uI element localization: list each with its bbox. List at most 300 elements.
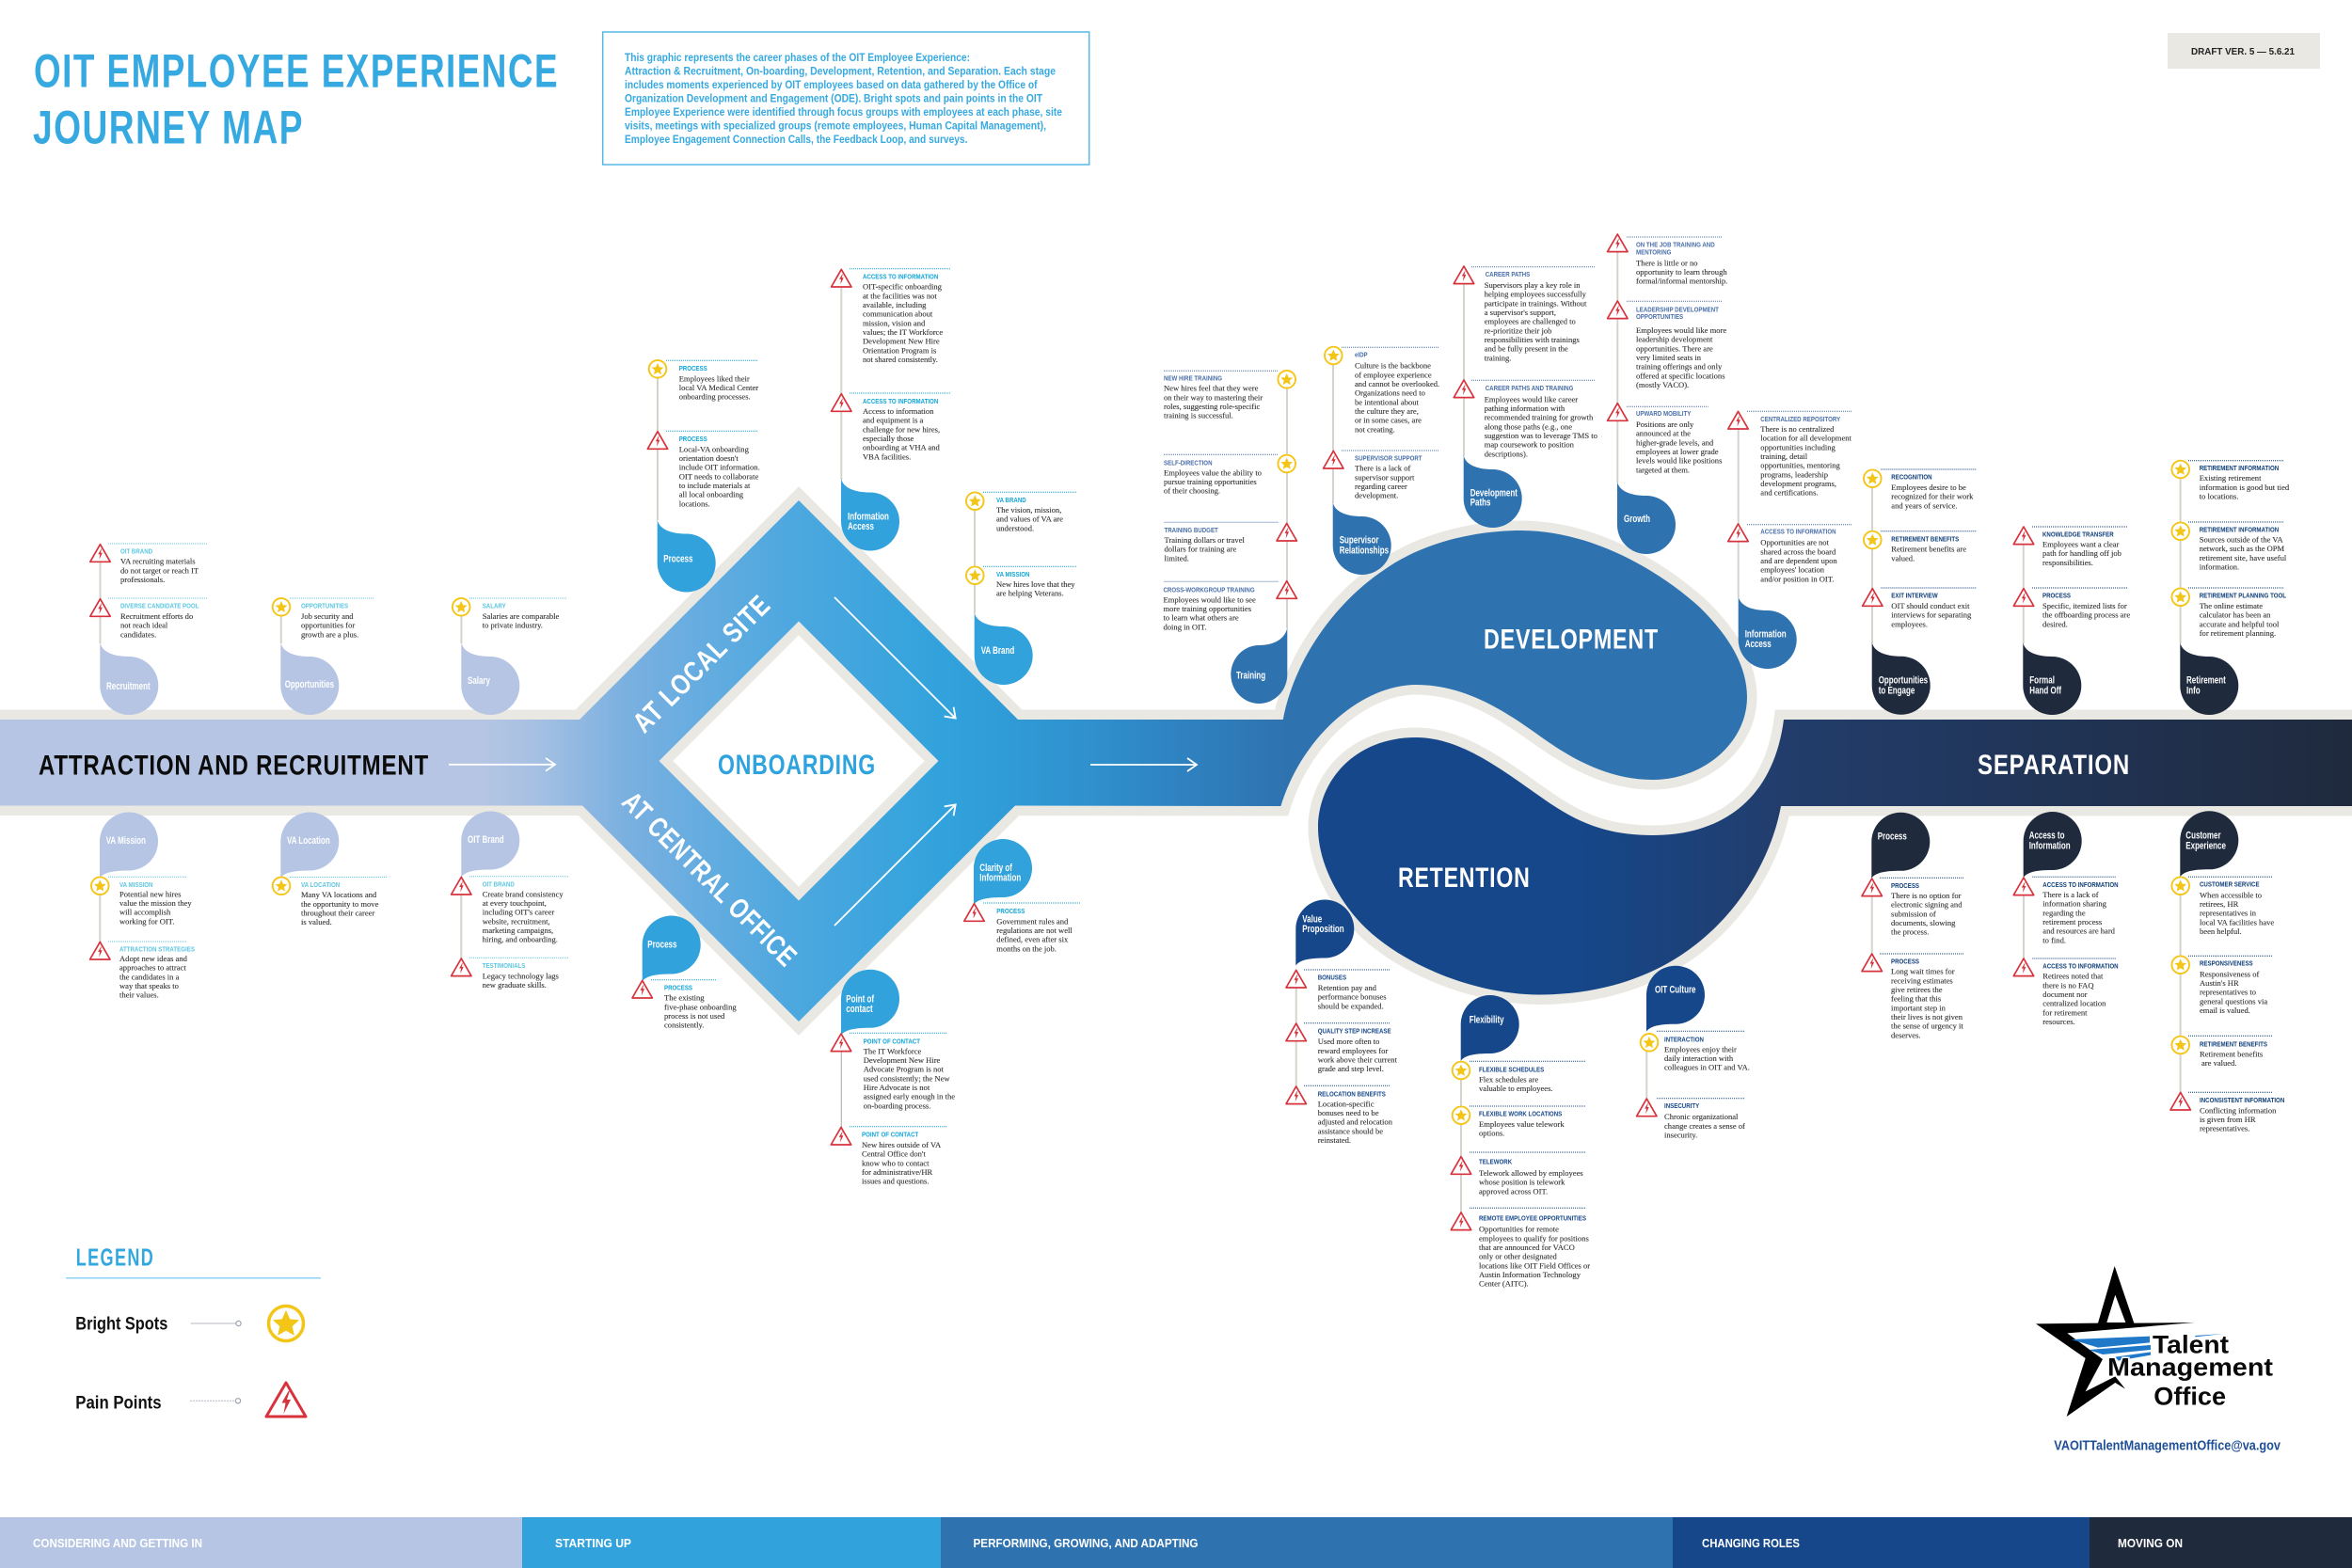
callout body: (mostly VACO).	[1636, 380, 1689, 389]
icon: star logo	[2036, 1266, 2223, 1417]
callout body: orientation doesn't	[679, 453, 739, 463]
callout: Testimonials	[452, 958, 569, 990]
callout body: been helpful.	[2200, 927, 2242, 936]
icon: bright spot	[1864, 469, 1882, 487]
callout body: Opportunities for remote	[1479, 1225, 1559, 1234]
callout: Flexible work locations	[1453, 1106, 1586, 1138]
callout body: all local onboarding	[679, 490, 744, 499]
footer: performing, growing, and adapting	[941, 1517, 1673, 1568]
drop: VA Brand: VA Brand	[981, 645, 1014, 657]
drop: VA Location: VA Location	[287, 835, 330, 847]
column: Process (separation)	[1862, 813, 1964, 1039]
callout body: formal/informal mentorship.	[1636, 277, 1727, 286]
footer: moving on: MOVING ON	[2118, 1536, 2183, 1550]
callout body: recognized for their work	[1891, 492, 1974, 501]
callout body: issues and questions.	[862, 1177, 929, 1186]
callout heading: PROCESS	[996, 909, 1025, 915]
callout heading: TELEWORK	[1479, 1159, 1512, 1166]
callout body: challenge for new hires,	[863, 424, 940, 434]
icon: bright spot	[1864, 531, 1882, 548]
callout body: and/or position in OIT.	[1760, 574, 1834, 583]
callout heading: RETIREMENT BENEFITS	[2200, 1041, 2267, 1048]
callout body: daily interaction with	[1664, 1053, 1734, 1063]
callout body: a supervisor's support,	[1485, 308, 1556, 317]
callout body: Create brand consistency	[483, 889, 564, 898]
callout body: Existing retirement	[2200, 473, 2262, 483]
callout body: assistance should be	[1318, 1126, 1383, 1135]
callout body: that are announced for VACO	[1479, 1243, 1575, 1252]
callout body: to private industry.	[483, 621, 543, 630]
callout heading: NEW HIRE TRAINING	[1164, 375, 1222, 382]
title: OIT EMPLOYEE EXPERIENCE	[34, 45, 559, 98]
drop: Development Paths	[1464, 455, 1522, 528]
callout body: submission of	[1891, 909, 1936, 918]
icon: pain point	[90, 599, 110, 616]
callout body: Employees would like more	[1636, 325, 1726, 335]
drop: Flexibility	[1461, 995, 1519, 1061]
callout body: Recruitment efforts do	[120, 611, 193, 621]
drop: Supervisor Relationships: Relationships	[1340, 545, 1389, 557]
callout body: used consistently; the New	[864, 1073, 950, 1083]
callout body: Job security and	[301, 611, 354, 621]
callout body: Central Office don't	[862, 1149, 926, 1159]
callout body: locations.	[679, 499, 710, 508]
icon: bright spot	[91, 877, 109, 895]
callout body: retirement site, have useful	[2200, 553, 2287, 562]
callout: Process	[632, 980, 737, 1030]
callout body: the opportunity to move	[301, 899, 379, 909]
callout body: New hires feel that they were	[1164, 384, 1259, 393]
callout body: Retirees noted that	[2042, 972, 2104, 981]
logo: Talent Management Office	[2036, 1266, 2280, 1454]
callout body: five-phase onboarding	[664, 1002, 737, 1011]
callout body: Used more often to	[1318, 1037, 1379, 1046]
icon: bright spot	[1325, 347, 1343, 364]
icon: pain point	[1862, 954, 1882, 972]
callout body: local VA Medical Center	[679, 383, 758, 392]
callout body: Orientation Program is	[863, 345, 937, 355]
callout body: valuable to employees.	[1479, 1084, 1553, 1093]
callout body: way that speaks to	[119, 981, 179, 990]
icon: bright spot	[2171, 461, 2189, 478]
callout body: documents, slowing	[1891, 918, 1956, 927]
heading: at central office: AT CENTRAL OFFICE	[616, 786, 803, 973]
callout heading: TRAINING BUDGET	[1165, 527, 1219, 534]
callout heading: CAREER PATHS	[1486, 272, 1531, 278]
callout body: communication about	[863, 309, 933, 319]
callout body: whose position is telework	[1479, 1178, 1565, 1187]
arrow: onboarding to development	[1090, 758, 1197, 771]
callout heading: TESTIMONIALS	[483, 963, 526, 970]
icon: pain point	[831, 1127, 851, 1145]
column: Point of contact	[831, 970, 955, 1186]
callout heading: PROCESS	[1891, 958, 1919, 966]
callout heading: ACCESS TO INFORMATION	[1760, 529, 1836, 536]
column: VA Mission	[90, 813, 195, 1000]
icon: pain point	[832, 394, 851, 411]
callout body: employees.	[1891, 619, 1928, 628]
callout heading: SALARY	[483, 603, 506, 610]
callout body: representatives.	[2200, 1124, 2249, 1133]
drop: Customer Experience	[2180, 811, 2238, 877]
intro text box: includes moments experienced by OIT employees based on data gathered by the Office of	[625, 78, 1038, 91]
heading: onboarding: ONBOARDING	[718, 750, 876, 781]
callout heading: RETIREMENT INFORMATION	[2200, 466, 2279, 472]
drop: Retirement Info: Retirement	[2186, 675, 2226, 687]
callout: Bonuses	[1286, 970, 1391, 1010]
callout body: Responsiveness of	[2200, 969, 2260, 978]
callout heading: CENTRALIZED REPOSITORY	[1760, 417, 1841, 423]
callout body: only or other designated	[1479, 1252, 1558, 1261]
callout: VA Brand	[966, 492, 1076, 532]
callout body: Sources outside of the VA	[2200, 534, 2283, 544]
intro text box: This graphic represents the career phases of the OIT Employee Experience:	[625, 51, 970, 64]
callout body: OIT-specific onboarding	[863, 282, 943, 292]
heading: at local site: AT LOCAL SITE	[628, 590, 777, 739]
callout body: not creating.	[1355, 424, 1395, 434]
callout body: the sense of urgency it	[1891, 1022, 1963, 1031]
legend: pain points: Pain Points	[75, 1393, 162, 1413]
callout body: Specific, itemized lists for	[2042, 601, 2127, 610]
footer: performing, growing, and adapting: PERFORMING, GROWING, AND ADAPTING	[973, 1536, 1199, 1550]
arrow: local site diagonal	[830, 593, 961, 723]
callout: OIT Brand	[452, 877, 569, 944]
callout body: Employees enjoy their	[1664, 1044, 1737, 1053]
drop: Clarity of Information	[974, 839, 1032, 905]
callout body: VA recruiting materials	[120, 557, 196, 566]
callout: Point of contact 2	[831, 1127, 946, 1186]
callout body: regulations are not well	[996, 926, 1073, 935]
drop: Clarity of Information: Information	[979, 873, 1021, 884]
callout body: be intentional about	[1355, 397, 1420, 406]
draft version tag: DRAFT VER. 5 — 5.6.21	[2191, 46, 2295, 57]
callout heading: CUSTOMER SERVICE	[2200, 881, 2260, 888]
footer bar: career phases	[0, 1517, 2352, 1568]
callout body: path for handling off job	[2042, 548, 2122, 558]
drop: Development Paths: Paths	[1470, 498, 1490, 509]
legend: bright spots	[75, 1306, 303, 1341]
drop: Process: Process	[663, 554, 692, 565]
callout body: roles, suggesting role-specific	[1164, 402, 1261, 411]
drop: OIT Brand: OIT Brand	[468, 834, 504, 846]
callout: Self-direction	[1164, 454, 1295, 496]
callout body: development.	[1355, 491, 1398, 500]
band: retention to separation	[1318, 720, 2352, 995]
callout body: opportunities including	[1760, 442, 1836, 451]
callout heading: POINT OF CONTACT	[862, 1132, 919, 1139]
callout body: opportunities for	[301, 621, 355, 630]
drop: Supervisor Relationships	[1333, 502, 1391, 575]
drop: Point of contact	[841, 970, 899, 1036]
callout body: consistently.	[664, 1021, 704, 1030]
callout body: to find.	[2042, 935, 2066, 944]
drop: Information Access	[1739, 596, 1797, 669]
icon: bright spot	[1641, 1034, 1658, 1052]
callout: Attraction strategies	[90, 942, 195, 1000]
contact email: VAOITTalentManagementOffice@va.gov	[2054, 1439, 2280, 1454]
icon: pain point	[832, 269, 851, 287]
callout body: the process.	[1891, 927, 1929, 937]
callout body: of their choosing.	[1164, 486, 1220, 496]
callout body: Salaries are comparable	[483, 611, 560, 621]
callout body: network, such as the OPM	[2200, 544, 2285, 553]
callout body: colleagues in OIT and VA.	[1664, 1063, 1750, 1072]
drop: Point of contact: Point of	[846, 993, 875, 1006]
callout body: know who to contact	[862, 1158, 930, 1167]
callout body: and years of service.	[1891, 500, 1958, 510]
callout: On the job training and mentoring	[1608, 234, 1727, 286]
callout body: process is not used	[664, 1011, 725, 1021]
drop: Opportunities: Opportunities	[285, 679, 334, 690]
drop: Value Proposition	[1295, 899, 1354, 965]
callout heading: RETIREMENT BENEFITS	[1891, 536, 1960, 544]
callout heading: EXIT INTERVIEW	[1891, 593, 1938, 600]
icon: bright spot	[1453, 1106, 1470, 1124]
callout: Knowledge transfer	[2013, 527, 2127, 567]
callout body: There is a lack of	[2042, 890, 2099, 899]
callout heading: FLEXIBLE WORK LOCATIONS	[1479, 1111, 1563, 1118]
callout body: candidates.	[120, 629, 156, 639]
callout body: levels would like positions	[1636, 456, 1723, 466]
callout body: at the facilities was not	[863, 291, 937, 300]
callout: Leadership development opportunities	[1608, 301, 1726, 389]
callout heading: REMOTE EMPLOYEE OPPORTUNITIES	[1479, 1215, 1586, 1223]
callout body: representatives in	[2200, 909, 2257, 918]
callout: Retirement benefits	[1864, 531, 1976, 562]
legend: bright spots: Bright Spots	[75, 1314, 167, 1334]
callout heading: ATTRACTION STRATEGIES	[119, 946, 195, 954]
callout body: Potential new hires	[119, 889, 182, 898]
callout body: responsibilities.	[2042, 558, 2093, 567]
callout body: hiring, and onboarding.	[483, 935, 558, 944]
callout: Telework	[1451, 1152, 1586, 1196]
callout body: announced at the	[1636, 429, 1691, 438]
icon: bright spot	[453, 598, 470, 616]
column: OIT Brand	[452, 811, 569, 990]
heading: retention: RETENTION	[1398, 863, 1531, 894]
callout body: supervisor support	[1355, 472, 1415, 482]
callout: Access to information 1	[832, 269, 951, 364]
callout body: adjusted and relocation	[1318, 1117, 1393, 1127]
column: Growth	[1608, 234, 1727, 554]
callout body: regarding the	[2042, 908, 2086, 917]
callout heading: PROCESS	[679, 436, 707, 443]
drop: OIT Culture	[1646, 966, 1705, 1032]
heading: separation: SEPARATION	[1978, 750, 2130, 781]
callout body: targeted at them.	[1636, 465, 1690, 474]
column: Training	[1163, 371, 1296, 704]
callout heading: FLEXIBLE SCHEDULES	[1479, 1067, 1545, 1073]
footer: moving on	[2090, 1517, 2352, 1568]
callout body: valued.	[1891, 553, 1915, 562]
callout body: especially those	[863, 434, 914, 443]
drop: Process: Process	[647, 940, 676, 951]
callout heading: INSECURITY	[1664, 1103, 1700, 1110]
callout body: limited.	[1165, 553, 1189, 562]
callout body: Center (AITC).	[1479, 1279, 1529, 1289]
callout body: Austin Information Technology	[1479, 1270, 1581, 1279]
callout body: Conflicting information	[2200, 1105, 2277, 1115]
callout body: to learn what others are	[1163, 613, 1239, 623]
callout body: retirees, HR	[2200, 899, 2239, 909]
icon: pain point	[1863, 589, 1883, 606]
callout body: Employees liked their	[679, 373, 750, 383]
callout body: the candidates in a	[119, 972, 180, 981]
callout body: for administrative/HR	[862, 1167, 933, 1177]
arrow: attraction to onboarding	[449, 758, 555, 771]
callout body: growth are a plus.	[301, 629, 358, 639]
callout heading: DIVERSE CANDIDATE POOL	[120, 603, 199, 610]
callout heading: PROCESS	[1891, 883, 1919, 890]
callout body: Organizations need to	[1355, 388, 1425, 398]
footer: considering and getting in: CONSIDERING AND GETTING IN	[33, 1536, 202, 1550]
callout body: and are dependent upon	[1760, 556, 1837, 565]
callout body: Opportunities are not	[1760, 538, 1830, 547]
callout body: deserves.	[1891, 1030, 1921, 1039]
column: Retirement Info	[2171, 461, 2290, 715]
icon: pain point	[2013, 527, 2034, 545]
callout body: and equipment is a	[863, 416, 924, 425]
callout body: There is little or no	[1636, 258, 1698, 267]
callout body: Culture is the backbone	[1355, 361, 1431, 371]
column: Clarity of Information	[964, 839, 1081, 953]
callout body: for retirement planning.	[2200, 628, 2276, 638]
callout: Career paths and training	[1454, 380, 1597, 458]
callout body: resources.	[2042, 1017, 2075, 1026]
icon: pain point	[1451, 1157, 1471, 1174]
footer: starting up: STARTING UP	[555, 1536, 631, 1550]
column: Recruitment	[90, 544, 207, 715]
drop: Retirement Info: Info	[2186, 685, 2201, 697]
callout: Exit interview	[1863, 588, 1976, 628]
icon: bright spot	[2171, 522, 2189, 540]
callout heading: ACCESS TO INFORMATION	[863, 274, 938, 281]
drop: Growth: Growth	[1624, 514, 1650, 525]
callout body: Flex schedules are	[1479, 1074, 1538, 1084]
callout body: Telework allowed by employees	[1479, 1168, 1583, 1178]
callout: Process bright spot	[649, 360, 758, 402]
icon: bright spot	[1278, 371, 1295, 388]
callout body: insecurity.	[1664, 1131, 1697, 1140]
callout body: There is a lack of	[1355, 464, 1410, 473]
callout: Training budget	[1165, 522, 1296, 562]
callout body: accurate and helpful tool	[2200, 619, 2280, 628]
drop: Formal Hand Off	[2023, 642, 2081, 715]
column: Development Paths	[1454, 266, 1597, 528]
drop: Value Proposition: Value	[1302, 913, 1322, 926]
callout body: Retirement benefits are	[1891, 545, 1966, 554]
callout heading: UPWARD MOBILITY	[1636, 411, 1692, 418]
icon: pain point	[647, 432, 668, 449]
callout: Interaction	[1641, 1031, 1750, 1072]
callout body: information is good but tied	[2200, 483, 2290, 492]
column: Access to Information (separation)	[2013, 812, 2119, 1026]
callout heading: PROCESS	[2042, 593, 2071, 600]
callout body: website, recruitment,	[483, 916, 550, 926]
callout body: calculator has been an	[2200, 610, 2271, 620]
callout body: professionals.	[120, 575, 165, 584]
callout body: and certifications.	[1760, 488, 1819, 498]
callout heading: POINT OF CONTACT	[864, 1038, 921, 1045]
callout heading: OIT BRAND	[120, 548, 152, 556]
callout body: mission, vision and	[863, 318, 926, 327]
band: attraction to development	[0, 500, 1747, 1022]
callout body: map coursework to position	[1485, 440, 1575, 450]
drop: Flexibility: Flexibility	[1470, 1014, 1504, 1026]
callout body: are valued.	[2201, 1058, 2237, 1068]
callout: Upward mobility	[1608, 404, 1723, 474]
callout heading: VA MISSION	[996, 571, 1030, 578]
callout body: opportunities. There are	[1636, 343, 1713, 353]
callout heading: PROCESS	[679, 366, 707, 372]
callout: eIDP	[1325, 347, 1439, 434]
callout body: for retirement	[2042, 1007, 2088, 1017]
callout body: desired.	[2042, 619, 2068, 628]
callout heading: ACCESS TO INFORMATION	[863, 399, 938, 405]
callout body: along those paths (e.g., one	[1485, 421, 1572, 431]
callout body: general questions via	[2200, 996, 2267, 1006]
callout body: to include materials at	[679, 481, 751, 490]
callout body: Retirement benefits	[2200, 1049, 2264, 1058]
callout body: representatives to	[2200, 988, 2256, 997]
callout body: of employee experience	[1355, 370, 1432, 379]
drop: Access to Information	[2024, 812, 2082, 878]
icon: pain point	[1451, 1212, 1471, 1230]
drop: Formal Hand Off: Formal	[2029, 675, 2055, 687]
callout body: descriptions).	[1485, 449, 1528, 458]
callout: Responsiveness	[2171, 956, 2272, 1015]
callout body: throughout their career	[301, 909, 374, 918]
column: Opportunities	[273, 598, 373, 715]
callout body: and cannot be overlooked.	[1355, 379, 1439, 388]
drop: Development Paths: Development	[1470, 487, 1518, 499]
callout body: Development New Hire	[863, 337, 940, 346]
drop: Process	[658, 519, 716, 593]
drop: Information Access: Access	[848, 521, 874, 532]
drop: Customer Experience: Customer	[2185, 831, 2221, 842]
callout body: training, detail	[1760, 451, 1808, 461]
callout body: or in some cases, are	[1355, 416, 1422, 425]
callout body: There is no centralized	[1760, 424, 1835, 434]
drop: Information Access: Access	[1745, 639, 1772, 650]
column: VA Brand	[966, 492, 1076, 685]
callout body: Positions are only	[1636, 420, 1694, 429]
column: Process (central office)	[632, 916, 737, 1030]
callout body: Hire Advocate is not	[864, 1083, 930, 1092]
callout heading: CROSS-WORKGROUP TRAINING	[1163, 587, 1255, 594]
callout heading: SELF-DIRECTION	[1164, 460, 1213, 467]
callout body: Employees value the ability to	[1164, 467, 1262, 477]
callout: Diverse candidate pool	[90, 598, 207, 639]
callout body: The online estimate	[2200, 601, 2263, 610]
column: Information Access (development)	[1728, 411, 1852, 669]
callout body: Chronic organizational	[1664, 1112, 1739, 1121]
callout body: at every touchpoint,	[483, 898, 547, 908]
callout body: information sharing	[2042, 899, 2107, 909]
callout: New hire training	[1164, 371, 1295, 420]
callout heading: OPPORTUNITIES	[1636, 314, 1684, 321]
callout body: OIT should conduct exit	[1891, 601, 1970, 610]
callout body: suggestion was to leverage TMS to	[1485, 431, 1597, 440]
callout heading: ON THE JOB TRAINING AND	[1636, 242, 1715, 249]
callout body: training is successful.	[1164, 411, 1233, 420]
callout: Flexible schedules	[1453, 1061, 1586, 1093]
callout body: Advocate Program is not	[864, 1065, 945, 1074]
journey path: bands, onboarding diamond, development and retention	[0, 500, 2352, 1022]
icon: bright spot	[2171, 588, 2189, 606]
callout body: opportunity to learn through	[1636, 267, 1727, 277]
callout body: values; the IT Workforce	[863, 327, 943, 337]
